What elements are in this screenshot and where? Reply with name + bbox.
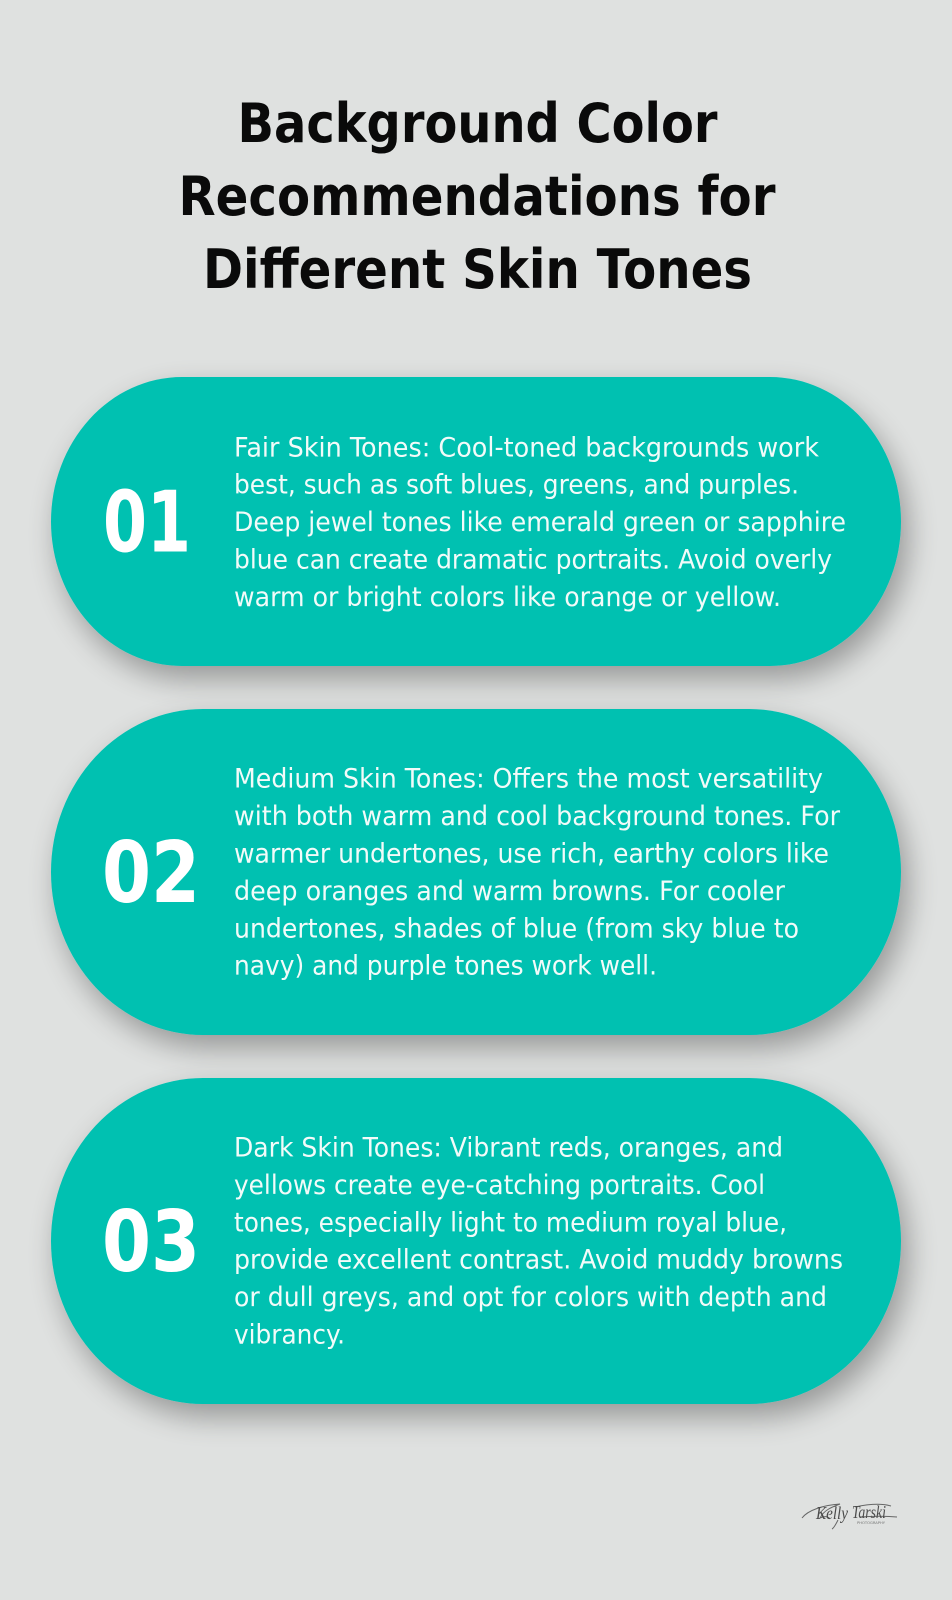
number 02: 02 [102, 824, 200, 923]
text: dark skin tones: Dark Skin Tones: Vibrant reds, oranges, and [234, 1133, 783, 1164]
text: dark skin tones: or dull greys, and opt for colors with depth and [234, 1282, 827, 1313]
pill background 2 [51, 709, 901, 1035]
text: fair skin tones: blue can create dramatic portraits. Avoid overly [234, 544, 832, 576]
pill background 1 [51, 377, 901, 666]
number 03: 03 [102, 1193, 200, 1292]
text: medium skin tones: navy) and purple tones work well. [234, 951, 657, 982]
signature logo: PHOTOGRAPHY [857, 1521, 886, 1525]
panel: fair skin tones [51, 377, 901, 666]
number 01: 01 [103, 474, 191, 572]
text: fair skin tones: Fair Skin Tones: Cool-toned backgrounds work [234, 432, 819, 463]
text: fair skin tones: Deep jewel tones like emerald green or sapphire [234, 507, 846, 538]
signature logo: Tarski [852, 1502, 886, 1522]
text: dark skin tones: vibrancy. [234, 1319, 345, 1350]
text: dark skin tones: provide excellent contrast. Avoid muddy browns [234, 1245, 843, 1276]
title: Recommendations for [178, 165, 776, 228]
text: dark skin tones [234, 1133, 843, 1350]
text: medium skin tones: with both warm and cool background tones. For [234, 801, 841, 832]
text: fair skin tones [234, 432, 846, 613]
text: dark skin tones: tones, especially light to medium royal blue, [234, 1207, 787, 1238]
text: medium skin tones: deep oranges and warm browns. For cooler [234, 876, 786, 907]
text: medium skin tones: Medium Skin Tones: Offers the most versatility [234, 764, 823, 795]
signature logo [802, 1502, 897, 1529]
text: fair skin tones: best, such as soft blues, greens, and purples. [234, 470, 799, 501]
title [178, 92, 776, 301]
title: Background Color [238, 92, 718, 155]
text: medium skin tones: undertones, shades of blue (from sky blue to [234, 913, 799, 944]
text: dark skin tones: yellows create eye-catching portraits. Cool [234, 1170, 765, 1201]
panel: medium skin tones [51, 709, 901, 1035]
text: medium skin tones [234, 764, 841, 982]
text: fair skin tones: warm or bright colors like orange or yellow. [234, 582, 781, 613]
signature logo: Kelly [815, 1503, 848, 1523]
panel: dark skin tones [51, 1078, 901, 1404]
pill background 3 [51, 1078, 901, 1404]
title: Different Skin Tones [203, 238, 752, 301]
text: medium skin tones: warmer undertones, use rich, earthy colors like [234, 838, 829, 869]
